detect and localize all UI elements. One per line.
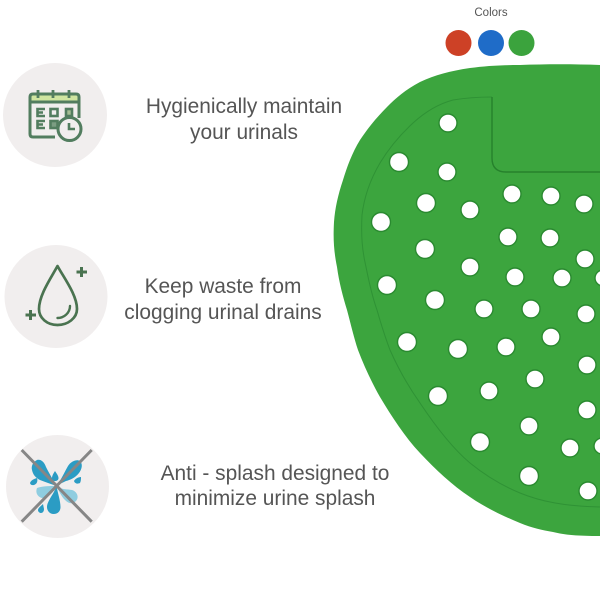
color swatches (446, 30, 534, 56)
text: hygienically maintain: your urinals (190, 120, 298, 144)
text: hygienically maintain (146, 95, 342, 144)
light splash lobes (36, 486, 56, 498)
icon: crossed-out splash (6, 435, 109, 538)
icon: water drop with plus signs (4, 245, 108, 348)
text: anti-splash (160, 462, 389, 510)
icon background circle (4, 245, 108, 348)
swatch: blue (478, 30, 504, 56)
icon: calendar with clock (3, 63, 107, 167)
calendar rings (38, 90, 69, 98)
colors label: Colors (474, 7, 508, 19)
mat drain holes (372, 114, 600, 500)
text: anti-splash: minimize urine splash (175, 487, 375, 510)
text: anti-splash: Anti - splash designed to (161, 462, 389, 484)
swatch: green (508, 30, 534, 56)
swatch: red (446, 30, 472, 56)
water drop (39, 266, 77, 325)
mat body (334, 64, 600, 536)
plus sign upper right (76, 267, 87, 277)
plus sign lower left (26, 310, 36, 320)
drop highlight (58, 306, 70, 318)
text: hygienically maintain: Hygienically maintain (146, 95, 342, 118)
calendar header band (30, 94, 79, 102)
blue splash drops (32, 460, 56, 486)
calendar date cells (38, 109, 72, 128)
clock hands (69, 123, 75, 129)
mat rectangular recess (492, 97, 600, 172)
calendar frame (30, 94, 79, 137)
text: keep waste from clogging: Keep waste from (145, 275, 301, 298)
text: keep waste from clogging: clogging urinal drains (124, 300, 322, 324)
mat inner raised outline (362, 97, 600, 507)
clock (58, 118, 81, 140)
cross lines (22, 450, 92, 522)
icon background circle (6, 435, 109, 538)
icon background circle (3, 63, 107, 167)
text: keep waste from clogging (124, 275, 322, 324)
